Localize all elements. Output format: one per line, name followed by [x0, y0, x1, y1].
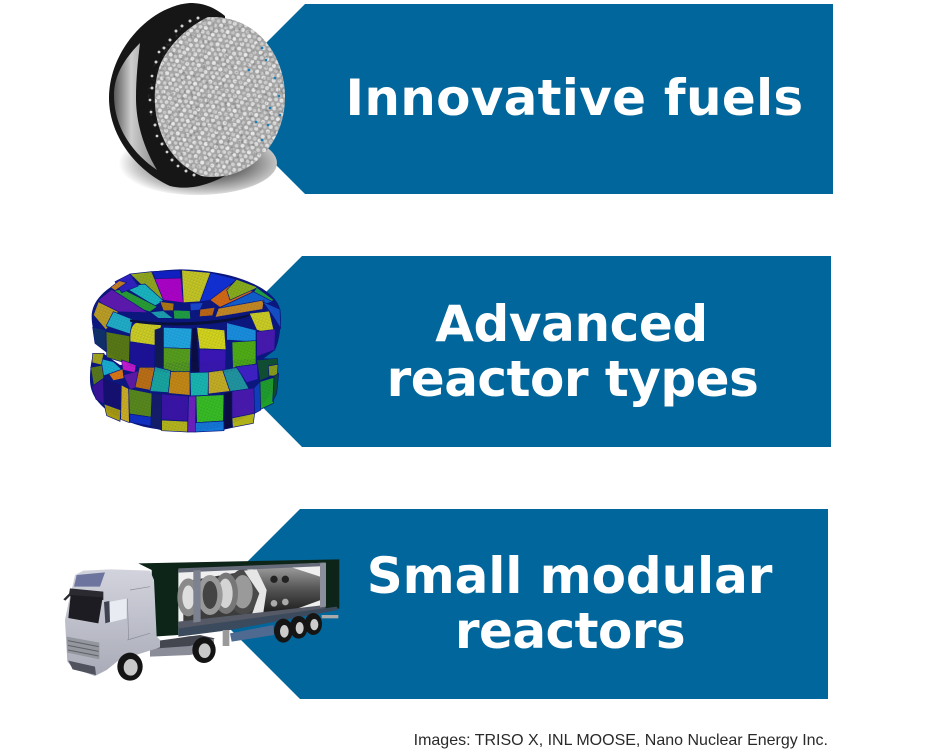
lower ring outer blocks	[91, 353, 279, 432]
heading: advanced reactor types	[387, 295, 758, 408]
scattered fuel particles at the sphere edge	[149, 16, 200, 176]
reactor frame	[177, 563, 326, 628]
upper ring top wedges	[98, 270, 281, 328]
panel: innovative fuels	[210, 4, 833, 194]
heading: advanced reactor types: Advanced	[435, 295, 708, 353]
heading: advanced reactor types: reactor types	[387, 350, 758, 408]
panel: advanced reactor types	[207, 256, 831, 447]
icon: truck carrying a reactor	[63, 559, 339, 681]
image credit: Images: TRISO X, INL MOOSE, Nano Nuclear Energy Inc.	[414, 732, 828, 749]
icon: tokamak mesh model	[90, 269, 281, 432]
trailer container	[138, 559, 339, 637]
truck cab	[63, 569, 216, 681]
heading: small modular reactors	[367, 547, 773, 660]
heading: small modular reactors: reactors	[455, 602, 685, 660]
trailer chassis and wheels	[178, 607, 338, 646]
heading: innovative fuels: Innovative fuels	[346, 69, 803, 127]
panel: small modular reactors	[205, 509, 828, 699]
icon: TRISO fuel sphere	[109, 3, 288, 195]
heading: small modular reactors: Small modular	[367, 547, 773, 605]
upper ring rim blocks	[93, 302, 275, 373]
central gap between rings	[130, 314, 250, 325]
lower ring inner columns	[99, 358, 277, 396]
